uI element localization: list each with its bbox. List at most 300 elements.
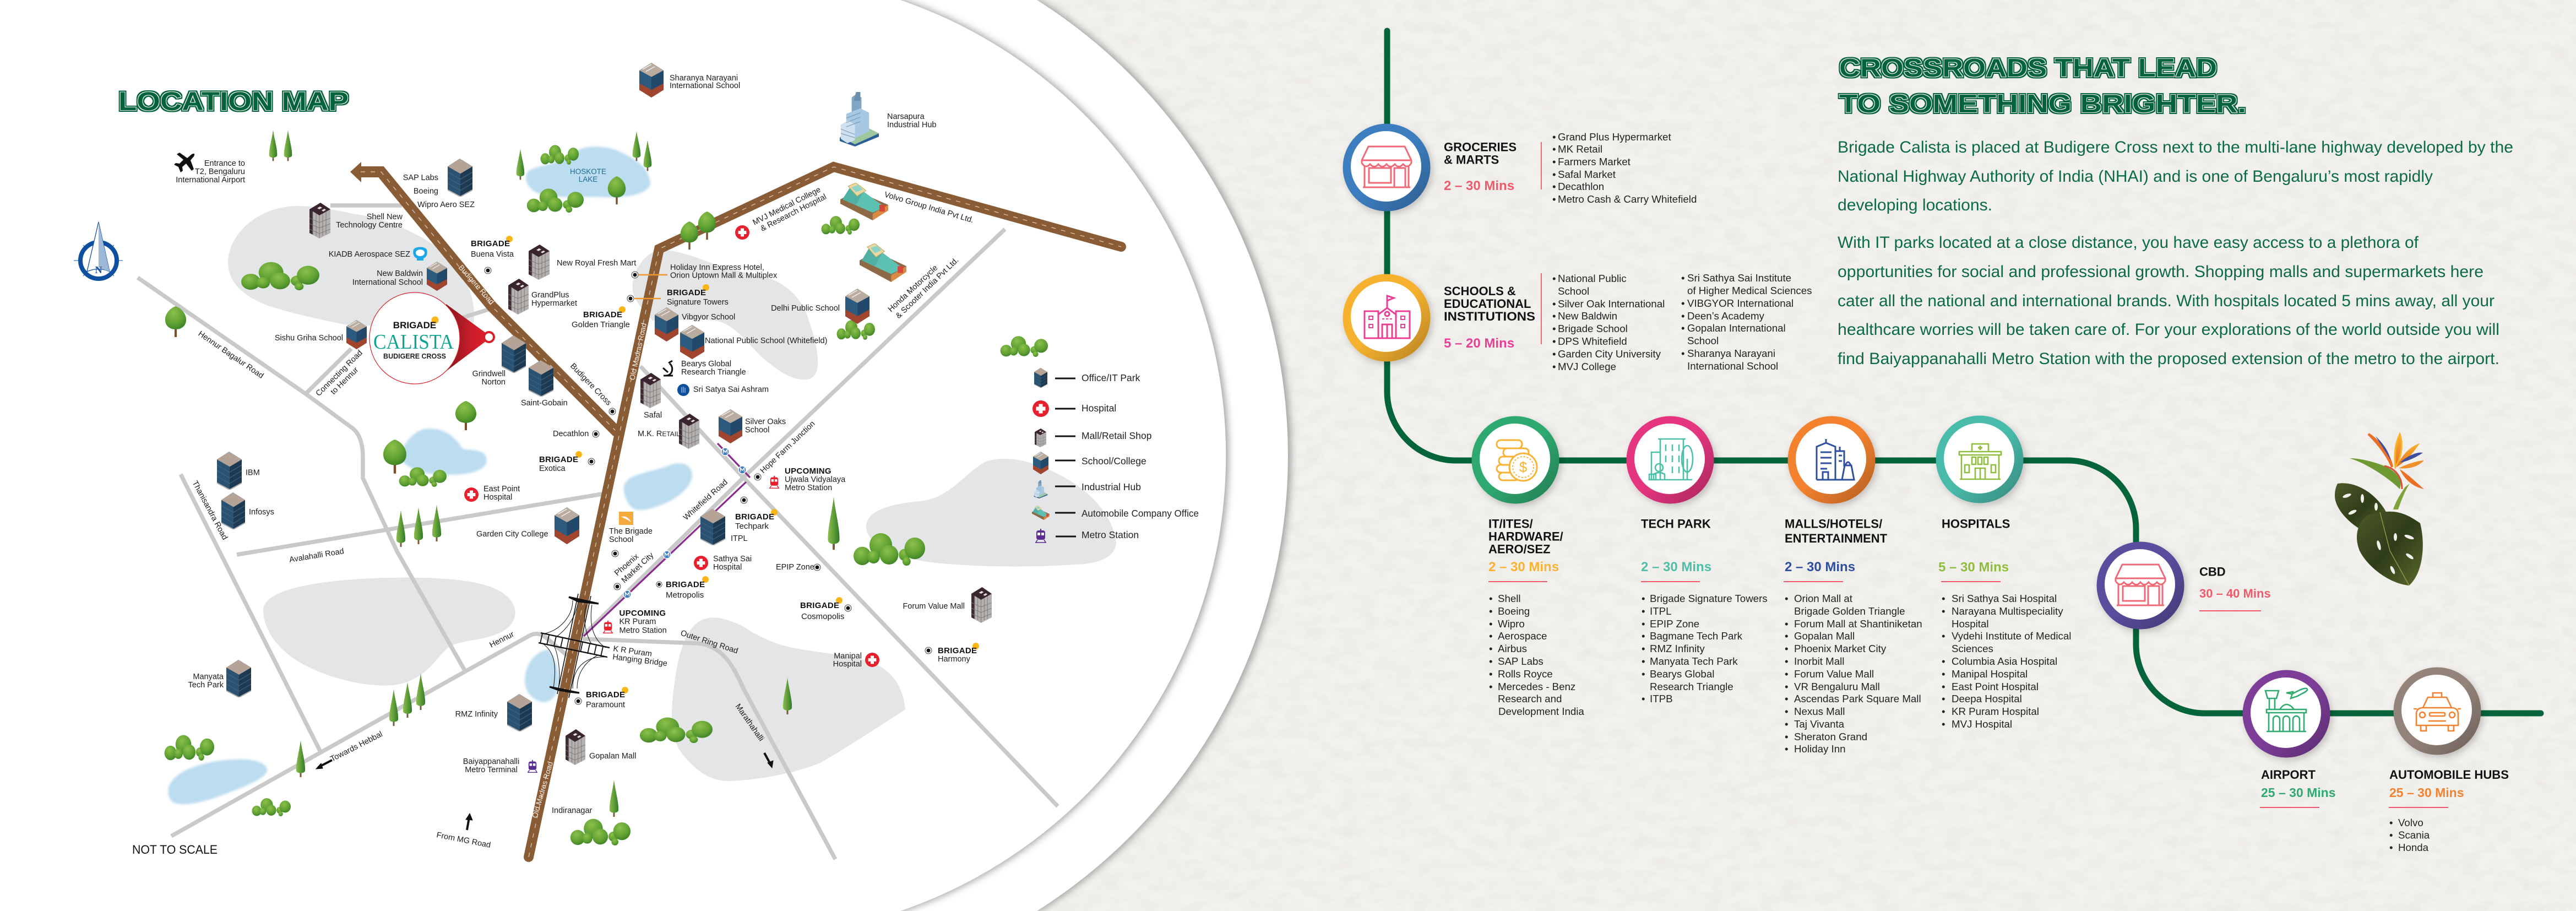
list: schools column 1: Garden City University bbox=[1558, 348, 1661, 360]
list: schools column 2: School bbox=[1687, 335, 1719, 346]
list: groceries: • bbox=[1552, 193, 1556, 205]
landmark: New Royal Fresh Mart: New Royal Fresh Mart bbox=[557, 259, 636, 268]
legend row: Metro Station bbox=[1035, 529, 1139, 543]
icon: airplane with airport label: Entrance to bbox=[204, 159, 245, 168]
text block: paragraph two: healthcare worries will be taken care of. For your explorations of the world outside you will bbox=[1838, 321, 2499, 339]
list: malls: Holiday Inn bbox=[1794, 743, 1846, 755]
list: groceries: • bbox=[1552, 181, 1556, 192]
landmark: Silver Oaks School: School bbox=[745, 426, 769, 435]
list: groceries: • bbox=[1552, 131, 1556, 143]
list: schools column 1: Brigade School bbox=[1558, 323, 1628, 334]
list: hospitals: Sri Sathya Sai Hospital bbox=[1952, 593, 2057, 604]
landmark: Delhi Public School: Delhi Public School bbox=[771, 304, 840, 313]
callout: Brigade Calista: BUDIGERE CROSS bbox=[383, 353, 446, 360]
text block: paragraph one: National Highway Authority of India (NHAI) and is one of Bengaluru’s most rapidly bbox=[1838, 167, 2433, 186]
landmark: Brigade Harmony bbox=[925, 643, 979, 664]
heading: crossroads: CROSSROADS THAT LEAD bbox=[1839, 53, 2217, 82]
icon: airplane with airport label: T2, Bengaluru bbox=[195, 167, 245, 176]
list: schools column 1: • bbox=[1552, 348, 1556, 360]
list: malls: Forum Mall at Shantiniketan bbox=[1794, 618, 1922, 630]
list: tech park: • bbox=[1642, 655, 1645, 667]
landmark: Manyata Tech Park: Manyata bbox=[193, 673, 224, 681]
road names: Budigere Cross bbox=[568, 362, 613, 408]
road names: Old Madras Road bbox=[530, 761, 555, 819]
landmark: Vibgyor School bbox=[655, 307, 735, 341]
list: automobile hubs: Honda bbox=[2398, 842, 2429, 853]
landmark: Brigade Metropolis bbox=[656, 576, 709, 600]
landmark: Manipal Hospital: Hospital bbox=[833, 660, 862, 669]
list: malls: • bbox=[1785, 718, 1789, 730]
list: IT: • bbox=[1489, 593, 1493, 604]
road names: Whitefield Road bbox=[682, 478, 730, 522]
legend row: Automobile Company Office: Automobile Company Office bbox=[1082, 508, 1199, 519]
underline bbox=[2389, 807, 2448, 808]
travel time: 25 – 30 Mins bbox=[2261, 785, 2336, 800]
travel time: 5 – 20 Mins bbox=[1444, 336, 1514, 351]
underline bbox=[1941, 581, 2001, 582]
landmark: Brigade Cosmopolis bbox=[800, 597, 851, 621]
list: automobile hubs: • bbox=[2389, 829, 2393, 840]
list: schools column 1: • bbox=[1552, 310, 1556, 322]
landmark: Manyata Tech Park: Tech Park bbox=[188, 681, 224, 690]
list: hospitals: • bbox=[1942, 605, 1945, 617]
list: hospitals: MVJ Hospital bbox=[1952, 718, 2012, 730]
list: automobile hubs: • bbox=[2389, 842, 2393, 853]
list: groceries: • bbox=[1552, 156, 1556, 167]
landmark: Brigade Golden Triangle: BRIGADE bbox=[583, 310, 622, 319]
list: schools column 1: DPS Whitefield bbox=[1558, 335, 1627, 347]
list: IT: SAP Labs bbox=[1498, 655, 1544, 667]
road names: Hope Farm Junction bbox=[759, 419, 817, 475]
heading: hospitals: HOSPITALS bbox=[1942, 517, 2010, 531]
list: IT: Development India bbox=[1498, 706, 1584, 717]
list: schools column 1: • bbox=[1552, 323, 1556, 334]
list: malls: • bbox=[1785, 630, 1789, 642]
list: automobile hubs: Scania bbox=[2398, 829, 2430, 840]
road names bbox=[190, 185, 975, 850]
landmark: Brigade Harmony: Harmony bbox=[938, 655, 971, 664]
landmark: Infosys: Infosys bbox=[249, 508, 274, 517]
landmark: Brigade Techpark and ITPL: Techpark bbox=[735, 522, 769, 531]
landmark: GrandPlus Hypermarket: GrandPlus bbox=[531, 291, 569, 300]
landmark: Brigade Golden Triangle: Golden Triangle bbox=[572, 320, 630, 329]
list: malls: • bbox=[1785, 618, 1789, 630]
text block: paragraph two: find Baiyappanahalli Metro Station with the proposed extension of the metro to the airport. bbox=[1838, 350, 2499, 368]
landmark: MK Retail: M.K. RETAIL bbox=[638, 430, 680, 438]
list: schools column 2: • bbox=[1681, 322, 1685, 334]
road names: Volvo Group India Pvt Ltd. bbox=[883, 190, 975, 225]
list: hospitals: • bbox=[1942, 668, 1945, 680]
list: hospitals: KR Puram Hospital bbox=[1952, 706, 2039, 717]
underline bbox=[2260, 807, 2319, 808]
list: hospitals: • bbox=[1942, 693, 1945, 704]
callout: Brigade Calista bbox=[369, 292, 494, 384]
text block: paragraph one: developing locations. bbox=[1838, 196, 1992, 214]
node: hospitals bbox=[1936, 415, 2074, 730]
list: groceries: Safal Market bbox=[1558, 169, 1616, 180]
list: groceries: Metro Cash & Carry Whitefield bbox=[1558, 193, 1697, 205]
landmark: Brigade Techpark and ITPL bbox=[700, 497, 778, 545]
landmark: Brigade Signature Towers: BRIGADE bbox=[667, 288, 706, 297]
underline bbox=[1641, 581, 1700, 582]
list: schools column 2: Gopalan International bbox=[1687, 322, 1786, 334]
heading: schools and educational institutions: EDUCATIONAL bbox=[1444, 297, 1531, 311]
list: hospitals: Narayana Multispeciality bbox=[1952, 605, 2063, 617]
list: tech park: ITPB bbox=[1650, 693, 1673, 704]
main road: Old Madras Road bbox=[529, 167, 1121, 857]
list: malls: Forum Value Mall bbox=[1794, 668, 1874, 680]
landmark: Hoskote Lake: LAKE bbox=[579, 175, 597, 183]
markers: Phoenix Market City bbox=[612, 550, 621, 590]
landmark: Saint-Gobain bbox=[521, 360, 568, 408]
road names: Market City bbox=[620, 551, 656, 585]
list: tech park: • bbox=[1642, 630, 1645, 642]
list: schools column 1: Silver Oak International bbox=[1558, 298, 1665, 310]
list: hospitals: Manipal Hospital bbox=[1952, 668, 2028, 680]
icon ring: taxi bbox=[2393, 668, 2481, 755]
travel time: 2 – 30 Mins bbox=[1488, 560, 1559, 574]
landmark: Baiyappanahalli Metro Terminal: Baiyappanahalli bbox=[463, 757, 519, 766]
road names: Thanisandra Road bbox=[190, 479, 229, 541]
list: tech park: • bbox=[1642, 668, 1645, 680]
list: schools column 1: • bbox=[1552, 298, 1556, 310]
road names: Hennur bbox=[488, 630, 515, 650]
heading: IT/ITES/Hardware/Aero/SEZ: IT/ITES/ bbox=[1488, 517, 1533, 531]
trees and bushes bbox=[165, 130, 1048, 845]
landmark: Gopalan Mall bbox=[566, 729, 636, 765]
landmark: Sishu Griha School bbox=[275, 320, 367, 349]
landmark: Narsapura Industrial Hub: Narsapura bbox=[887, 112, 925, 121]
landmark: Narsapura Industrial Hub bbox=[840, 92, 936, 147]
underline bbox=[1784, 581, 1843, 582]
icon ring: coins bbox=[1471, 416, 1559, 503]
icon ring: groceries bbox=[1343, 123, 1431, 212]
list: hospitals: • bbox=[1942, 718, 1945, 730]
landmark: SAP, Boeing, Wipro: SAP Labs bbox=[403, 173, 438, 182]
title: LOCATION MAP bbox=[118, 86, 349, 116]
landmark: East Point Hospital: East Point bbox=[483, 485, 520, 494]
icon: MVJ hospital bbox=[735, 225, 749, 240]
landmark: Grindwell Norton bbox=[472, 335, 526, 387]
list: schools column 1: • bbox=[1552, 335, 1556, 347]
road names: Hennur Bagalur Road bbox=[197, 329, 265, 381]
legend row: School/College: School/College bbox=[1082, 456, 1146, 467]
road names: Connecting Road bbox=[314, 349, 365, 398]
landmark: Gopalan Mall: Gopalan Mall bbox=[589, 752, 636, 761]
list: malls: Brigade Golden Triangle bbox=[1794, 605, 1905, 617]
list: malls: Taj Vivanta bbox=[1794, 718, 1845, 730]
road names: Outer Ring Road bbox=[680, 629, 739, 655]
list: malls: Ascendas Park Square Mall bbox=[1794, 693, 1921, 704]
legend row: Office/IT Park bbox=[1034, 368, 1140, 388]
landmark: IBM bbox=[217, 452, 260, 490]
landmark: East Point Hospital: Hospital bbox=[483, 493, 512, 502]
icon ring: airport bbox=[2242, 670, 2330, 758]
landmark: RMZ Infinity bbox=[455, 694, 532, 731]
grey secondary roads bbox=[138, 205, 1058, 859]
travel time: 2 – 30 Mins bbox=[1444, 178, 1514, 193]
node: IT/ITES bbox=[1471, 416, 1584, 717]
list: malls: Phoenix Market City bbox=[1794, 643, 1887, 654]
note: not to scale: NOT TO SCALE bbox=[132, 843, 218, 856]
landmark: Sri Satya Sai Ashram: Sri Satya Sai Ashram bbox=[693, 386, 769, 394]
heading: malls, hotels, entertainment: MALLS/HOTELS/ bbox=[1785, 517, 1882, 531]
heading: airport: AIRPORT bbox=[2261, 768, 2316, 782]
icon ring: office towers bbox=[1627, 416, 1714, 503]
panel: intro copy bbox=[1838, 53, 2518, 368]
landmark: Brigade Harmony: BRIGADE bbox=[938, 646, 977, 655]
landmark: Sharanya Narayani International School bbox=[639, 63, 740, 97]
landmark: Upcoming Ujwala Vidyalaya Metro Station: Ujwala Vidyalaya bbox=[785, 475, 846, 484]
list: malls: • bbox=[1785, 655, 1789, 667]
legend row: Industrial Hub: Industrial Hub bbox=[1082, 481, 1141, 492]
text block: paragraph two: cater all the national and international brands. With hospitals located 5 mins away, all your bbox=[1838, 292, 2495, 310]
heading: malls, hotels, entertainment: ENTERTAINMENT bbox=[1785, 532, 1888, 545]
list: hospitals: • bbox=[1942, 655, 1945, 667]
landmark: National Public School: National Public School (Whitefield) bbox=[705, 337, 827, 345]
legend row: Hospital: Hospital bbox=[1082, 403, 1116, 414]
list: IT: Boeing bbox=[1498, 605, 1530, 617]
list: hospitals: Deepa Hospital bbox=[1952, 693, 2022, 704]
landmark: East Point Hospital bbox=[464, 485, 520, 502]
landmark: Sharanya Narayani International School: Sharanya Narayani bbox=[670, 74, 738, 83]
list: IT: Research and bbox=[1498, 693, 1562, 704]
landmark: Brigade Metropolis: Metropolis bbox=[666, 590, 704, 600]
heading: IT/ITES/Hardware/Aero/SEZ: HARDWARE/ bbox=[1488, 530, 1563, 543]
landmark: Brigade Metropolis: BRIGADE bbox=[666, 580, 705, 589]
landmark: SAP, Boeing, Wipro bbox=[403, 159, 475, 209]
icon: airplane with airport label bbox=[174, 153, 245, 185]
list: IT: • bbox=[1489, 605, 1493, 617]
landmark: Upcoming Ujwala Vidyalaya Metro Station: UPCOMING bbox=[785, 467, 832, 476]
list: hospitals: Vydehi Institute of Medical bbox=[1952, 630, 2071, 642]
list: hospitals: Hospital bbox=[1952, 618, 1989, 630]
landmark: The Brigade School: School bbox=[609, 535, 633, 544]
landmark: Bearys Global Research Triangle: Bearys Global bbox=[681, 360, 731, 368]
landmark: The Brigade School: The Brigade bbox=[609, 527, 653, 536]
legend row: Office/IT Park: Office/IT Park bbox=[1082, 372, 1140, 383]
list: malls: • bbox=[1785, 643, 1789, 654]
landmark: New Baldwin International School: International School bbox=[352, 278, 423, 287]
list: malls: • bbox=[1785, 593, 1789, 604]
list: schools column 2: International School bbox=[1687, 360, 1778, 372]
metro line bbox=[584, 443, 750, 636]
grey neighbourhood zones bbox=[228, 206, 1116, 781]
text block: paragraph two: With IT parks located at a close distance, you have easy access to a plethora of bbox=[1838, 234, 2419, 252]
landmark: Upcoming KR Puram Metro Station: KR Puram bbox=[619, 617, 656, 626]
landmark: New Royal Fresh Mart bbox=[529, 245, 636, 280]
node: tech park bbox=[1627, 416, 1770, 704]
list: IT: Aerospace bbox=[1498, 630, 1547, 642]
landmark: Hoskote Lake: HOSKOTE bbox=[570, 167, 606, 176]
list: tech park: Bearys Global bbox=[1650, 668, 1714, 680]
legend row: Hospital bbox=[1032, 400, 1116, 417]
landmark: Brigade Golden Triangle bbox=[572, 306, 630, 329]
list: malls: VR Bengaluru Mall bbox=[1794, 681, 1880, 692]
list: schools column 2: • bbox=[1681, 297, 1685, 309]
list: malls: • bbox=[1785, 743, 1789, 755]
road names: Marathahalli bbox=[733, 702, 765, 743]
list: IT: Mercedes - Benz bbox=[1498, 681, 1575, 692]
list: schools column 2: • bbox=[1681, 272, 1685, 284]
landmark: Shell New Technology Centre bbox=[309, 203, 403, 238]
list: schools column 2: Sri Sathya Sai Institute bbox=[1687, 272, 1791, 284]
landmark: Hoskote Lake bbox=[570, 167, 606, 183]
road names: to Hennur bbox=[329, 366, 360, 397]
legend row: Industrial Hub bbox=[1034, 480, 1141, 498]
callout: Brigade Calista: CALISTA bbox=[373, 330, 454, 354]
list: IT: Airbus bbox=[1498, 643, 1527, 654]
landmark: Upcoming Ujwala Vidyalaya Metro Station: Metro Station bbox=[785, 484, 832, 492]
landmark: GrandPlus Hypermarket bbox=[508, 279, 577, 314]
list: hospitals: • bbox=[1942, 593, 1945, 604]
callout: Brigade Calista: BRIGADE bbox=[393, 320, 436, 330]
icon ring: storefront bbox=[2097, 542, 2184, 629]
landmark: Delhi Public School bbox=[771, 289, 869, 324]
list: malls: Sheraton Grand bbox=[1794, 731, 1867, 742]
travel time: 2 – 30 Mins bbox=[1785, 560, 1855, 574]
road names: Old Madras Road bbox=[628, 322, 648, 381]
divider bbox=[1541, 142, 1542, 189]
landmark: Shell New Technology Centre: Shell New bbox=[367, 213, 403, 221]
landmark: Manyata Tech Park bbox=[188, 660, 251, 697]
list: groceries: • bbox=[1552, 143, 1556, 155]
road names: MVJ Medical College bbox=[752, 185, 822, 227]
landmark: Infosys bbox=[221, 492, 274, 529]
list: groceries: MK Retail bbox=[1558, 143, 1602, 155]
node: airport bbox=[2242, 670, 2336, 807]
list: tech park: • bbox=[1642, 693, 1645, 704]
road names: Hanging Bridge bbox=[612, 653, 668, 668]
icon ring: schools bbox=[1343, 274, 1431, 361]
list: malls: Orion Mall at bbox=[1794, 593, 1853, 604]
heading: something brighter: TO SOMETHING BRIGHTER. bbox=[1839, 89, 2246, 118]
landmark: Silver Oaks School: Silver Oaks bbox=[745, 417, 786, 426]
text block: paragraph one: Brigade Calista is placed at Budigere Cross next to the multi-lane highway developed by the bbox=[1838, 138, 2513, 156]
list: schools column 1: MVJ College bbox=[1558, 361, 1616, 372]
list: hospitals: • bbox=[1942, 706, 1945, 717]
node: automobile hubs bbox=[2389, 668, 2509, 853]
road names: Budigere Road bbox=[457, 263, 496, 306]
landmark: Brigade Buena Vista: Buena Vista bbox=[471, 250, 514, 259]
list: automobile hubs: • bbox=[2389, 817, 2393, 828]
landmark: Brigade Signature Towers bbox=[667, 284, 729, 307]
list: schools column 1: New Baldwin bbox=[1558, 310, 1617, 322]
landmark: Sathya Sai Hospital: Sathya Sai bbox=[713, 555, 752, 563]
list: malls: • bbox=[1785, 681, 1789, 692]
landmark: Brigade Buena Vista bbox=[471, 236, 514, 274]
landmark: KIADB Aerospace SEZ bbox=[329, 247, 427, 261]
list: malls: • bbox=[1785, 706, 1789, 717]
heading: CBD: CBD bbox=[2199, 565, 2226, 578]
heading: IT/ITES/Hardware/Aero/SEZ: AERO/SEZ bbox=[1488, 542, 1550, 556]
list: hospitals: Columbia Asia Hospital bbox=[1952, 655, 2057, 667]
panel: location map bbox=[74, 63, 1199, 859]
landmark: Grindwell Norton: Grindwell bbox=[472, 370, 506, 378]
landmark: New Baldwin International School: New Baldwin bbox=[377, 269, 423, 278]
heading: schools and educational institutions: INSTITUTIONS bbox=[1444, 310, 1535, 323]
list: malls: Gopalan Mall bbox=[1794, 630, 1855, 642]
list: malls: • bbox=[1785, 731, 1789, 742]
landmark: Baiyappanahalli Metro Terminal: Metro Terminal bbox=[465, 766, 518, 774]
timeline path bbox=[1387, 31, 2541, 713]
list: schools column 1: National Public bbox=[1558, 273, 1627, 284]
list: groceries: Farmers Market bbox=[1558, 156, 1631, 167]
landmark: Upcoming KR Puram Metro Station bbox=[603, 609, 667, 635]
landmark: Bearys Global Research Triangle: Research Triangle bbox=[681, 368, 746, 377]
list: IT: • bbox=[1489, 643, 1493, 654]
list: schools column 2: • bbox=[1681, 310, 1685, 322]
list: schools column 1: • bbox=[1552, 273, 1556, 284]
travel time: 5 – 30 Mins bbox=[1938, 560, 2009, 575]
list: schools column 2: • bbox=[1681, 348, 1685, 359]
list: malls: • bbox=[1785, 693, 1789, 704]
landmark: Brigade Exotica: Exotica bbox=[539, 464, 566, 473]
legend bbox=[1032, 368, 1199, 543]
landmark: Brigade Exotica: BRIGADE bbox=[539, 455, 578, 464]
landmark: Narsapura Industrial Hub: Industrial Hub bbox=[887, 121, 936, 129]
landmark: Safal bbox=[640, 373, 662, 420]
landmark: Safal: Safal bbox=[644, 411, 662, 420]
icon ring: hospital bbox=[1936, 415, 2023, 503]
list: schools column 2: Deen’s Academy bbox=[1687, 310, 1765, 322]
label: Indiranagar: Indiranagar bbox=[552, 806, 593, 815]
landmark: Sharanya Narayani International School: International School bbox=[670, 82, 740, 90]
heading: groceries and marts: GROCERIES bbox=[1444, 140, 1517, 154]
heading: tech park: TECH PARK bbox=[1641, 517, 1711, 531]
list: IT: • bbox=[1489, 668, 1493, 680]
list: IT: • bbox=[1489, 630, 1493, 642]
icon: compass bbox=[74, 222, 123, 279]
landmark: New Baldwin International School bbox=[352, 262, 447, 291]
illustration: tropical plant bbox=[2335, 434, 2424, 585]
list: schools column 2: Sharanya Narayani bbox=[1687, 348, 1775, 359]
landmark: EPIP Zone: EPIP Zone bbox=[776, 563, 814, 572]
underline bbox=[2199, 610, 2261, 611]
landmark: Garden City College bbox=[476, 507, 579, 544]
node: schools bbox=[1343, 272, 1815, 372]
list: hospitals: • bbox=[1942, 681, 1945, 692]
heading: schools and educational institutions: SCHOOLS & bbox=[1444, 284, 1516, 298]
road names: Towards Hebbal bbox=[329, 730, 384, 764]
road names: & Research Hospital bbox=[759, 192, 828, 234]
landmark: Bearys Global Research Triangle bbox=[663, 360, 746, 377]
legend row: Mall/Retail Shop: Mall/Retail Shop bbox=[1082, 430, 1151, 441]
hanging bridge bbox=[539, 594, 610, 698]
landmark: Baiyappanahalli Metro Terminal bbox=[463, 757, 537, 774]
list: IT: • bbox=[1489, 681, 1493, 692]
landmark: Sishu Griha School: Sishu Griha School bbox=[275, 334, 343, 343]
landmark: Brigade Exotica bbox=[539, 451, 595, 473]
list: tech park: Research Triangle bbox=[1650, 681, 1733, 692]
node: malls bbox=[1784, 416, 1925, 755]
landmark: Volvo plants bbox=[840, 183, 906, 282]
panel: connectivity timeline bbox=[1343, 31, 2541, 853]
list: malls: Inorbit Mall bbox=[1794, 655, 1844, 667]
list: tech park: Brigade Signature Towers bbox=[1650, 593, 1768, 604]
landmark: Saint-Gobain: Saint-Gobain bbox=[521, 399, 568, 408]
list: groceries: Decathlon bbox=[1558, 181, 1604, 192]
landmark: Brigade Paramount: Paramount bbox=[586, 701, 625, 709]
text block: paragraph two: opportunities for social and professional growth. Shopping malls and supermarkets here bbox=[1838, 263, 2483, 281]
landmark: GrandPlus Hypermarket: Hypermarket bbox=[531, 299, 577, 308]
direction arrows bbox=[316, 753, 773, 830]
landmark: Holiday Inn and Orion: Orion Uptown Mall & Multiplex bbox=[670, 271, 778, 280]
legend row: School/College bbox=[1033, 452, 1146, 474]
landmark: SAP, Boeing, Wipro: Boeing bbox=[414, 187, 438, 196]
list: tech park: • bbox=[1642, 593, 1645, 604]
panel: white map sheet bbox=[0, 0, 1291, 911]
